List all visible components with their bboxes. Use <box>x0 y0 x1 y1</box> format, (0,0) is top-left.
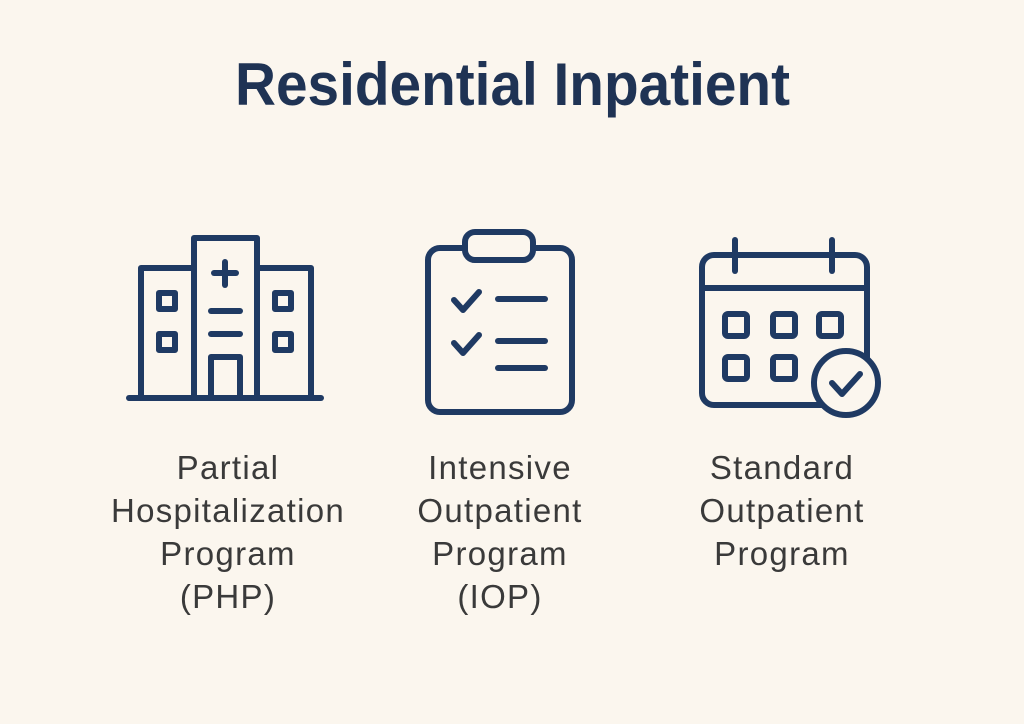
label: standard outpatient <box>699 449 865 572</box>
label: IOP: Program <box>432 535 568 572</box>
label: IOP <box>417 449 583 615</box>
title: Residential Inpatient <box>235 51 790 118</box>
label: IOP: (IOP) <box>457 578 543 615</box>
label: IOP: Outpatient <box>417 492 583 529</box>
label: standard outpatient: Outpatient <box>699 492 865 529</box>
label: PHP: Program <box>160 535 296 572</box>
label: IOP: Intensive <box>428 449 572 486</box>
label: PHP <box>111 449 345 615</box>
label: PHP: Partial <box>177 449 279 486</box>
icon: calendar with check <box>702 240 878 415</box>
label: standard outpatient: Program <box>714 535 850 572</box>
label: PHP: (PHP) <box>180 578 276 615</box>
label: standard outpatient: Standard <box>710 449 854 486</box>
icon: hospital building <box>129 238 321 398</box>
icon: clipboard checklist <box>428 232 572 412</box>
label: PHP: Hospitalization <box>111 492 345 529</box>
